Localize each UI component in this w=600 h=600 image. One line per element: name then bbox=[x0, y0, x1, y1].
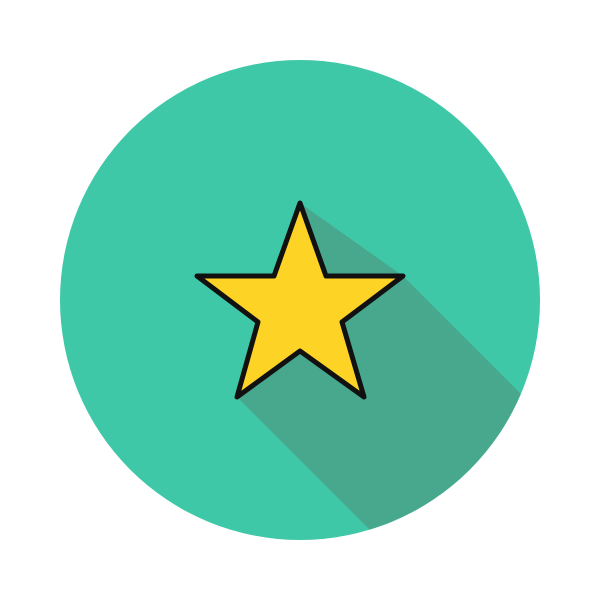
star bbox=[197, 203, 403, 397]
icon: star badge bbox=[60, 60, 540, 540]
circle background bbox=[60, 60, 540, 540]
long shadow bbox=[239, 206, 521, 530]
